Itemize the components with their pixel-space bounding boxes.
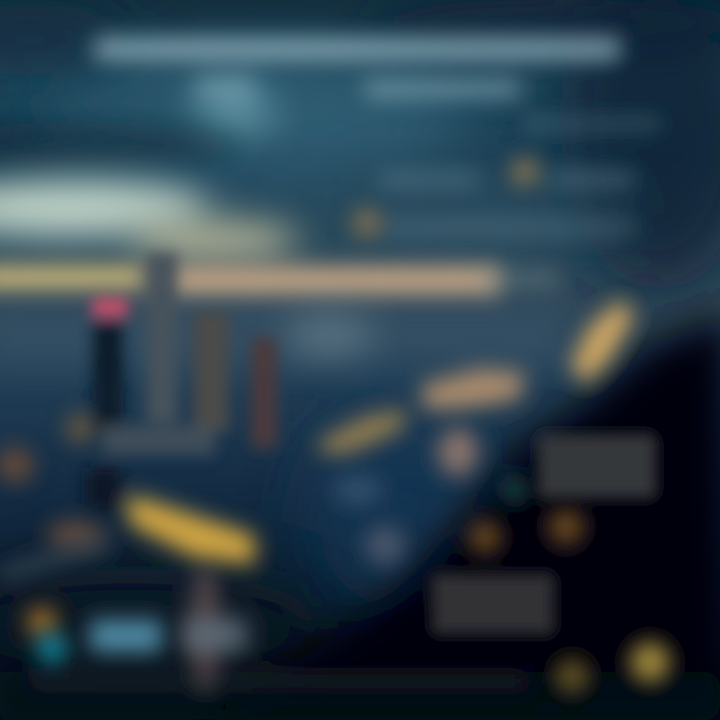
mid-right accents [334, 428, 584, 565]
bright horizon clouds [0, 180, 560, 296]
amber icons in sky [353, 158, 539, 237]
headline title block [95, 38, 620, 98]
storm clouds [0, 0, 720, 290]
skyline towers [86, 252, 277, 510]
logo bottom left [28, 608, 247, 663]
bottom footer strip [30, 674, 530, 688]
grey panel: lower centre [432, 574, 554, 634]
lower city haze [0, 308, 570, 690]
dark mountain silhouette [0, 315, 720, 720]
small upper-right text block [380, 118, 660, 236]
glowing golden road [0, 300, 635, 695]
grey panel: upper right [538, 434, 656, 498]
bottom right gold icons [555, 642, 670, 693]
